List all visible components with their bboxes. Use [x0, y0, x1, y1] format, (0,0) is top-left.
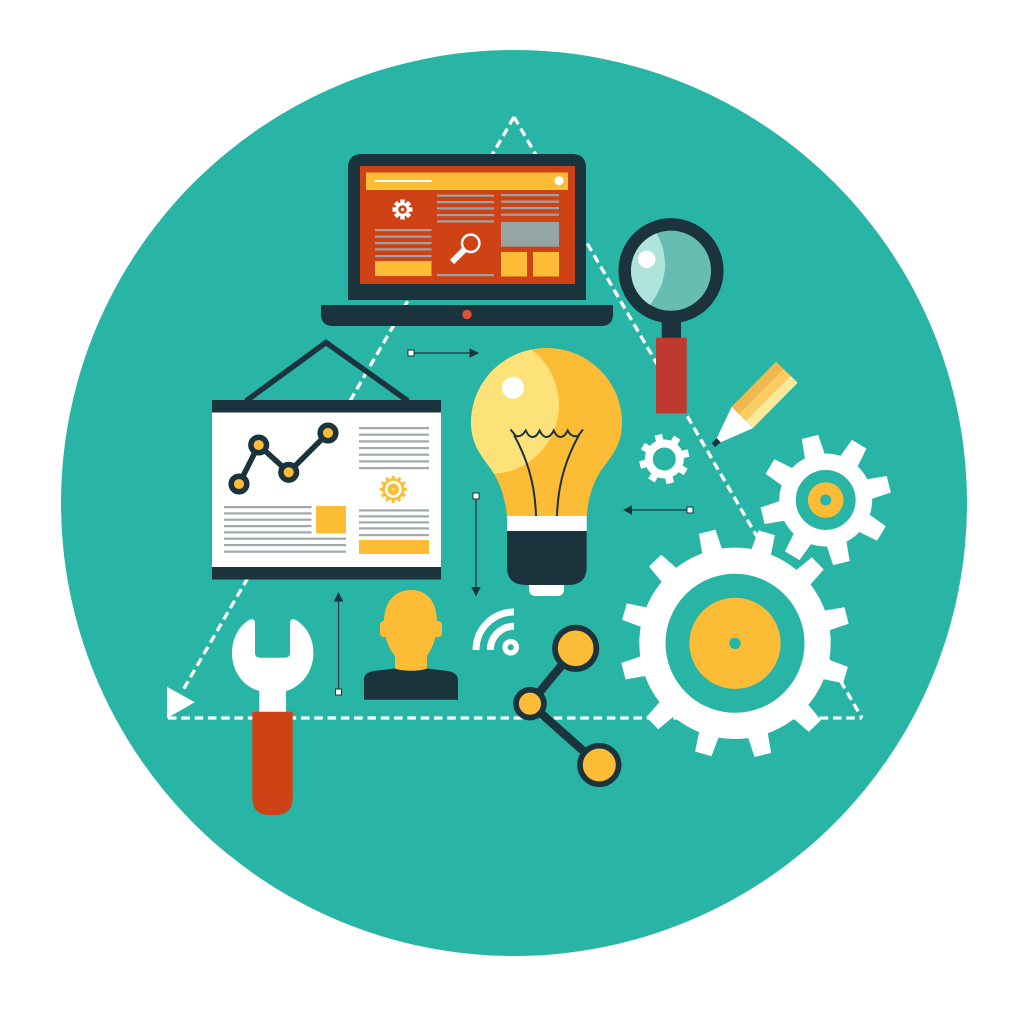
laptop screen — [360, 166, 575, 284]
laptop base — [321, 305, 613, 326]
bulb base — [507, 531, 587, 585]
laptop lid — [348, 154, 586, 300]
bulb glint — [502, 377, 524, 399]
pencil — [712, 362, 798, 447]
screen text columns — [375, 194, 559, 276]
light bulb — [471, 348, 622, 596]
magnifier neck — [662, 315, 681, 340]
poster yellow bar — [359, 540, 429, 554]
triangle arrowhead — [167, 687, 195, 718]
magnifying glass — [620, 224, 717, 413]
screen image placeholder — [501, 222, 559, 247]
poster top bar — [212, 400, 441, 412]
magnifier lens — [625, 224, 717, 317]
wrench handle — [252, 712, 293, 815]
person ears — [380, 621, 442, 637]
poster gear icon — [380, 476, 407, 503]
wrench — [232, 619, 313, 815]
small gear — [639, 434, 689, 484]
magnifier handle — [656, 338, 687, 413]
line chart — [231, 425, 336, 492]
poster board — [212, 342, 441, 580]
screen magnifier icon — [452, 235, 479, 262]
screen gear icon — [392, 200, 412, 220]
person shoulders — [364, 668, 458, 700]
share network icon — [516, 628, 619, 784]
laptop power dot — [462, 310, 472, 319]
poster hanger — [246, 342, 408, 401]
lens highlight — [631, 233, 665, 304]
wifi icon — [476, 612, 516, 653]
bulb filament — [510, 430, 583, 516]
arrow: down, left of bulb — [471, 493, 481, 596]
person — [364, 590, 458, 700]
medium gear — [760, 434, 891, 566]
lens glint — [638, 251, 655, 268]
poster yellow square — [316, 506, 346, 534]
laptop — [321, 154, 613, 326]
person head — [384, 590, 437, 672]
wrench head — [232, 619, 313, 712]
bulb collar — [507, 516, 587, 531]
bulb highlight — [471, 350, 559, 474]
screen yellow blocks — [375, 252, 559, 276]
dashed triangle — [168, 117, 862, 718]
arrow: right, above bulb — [408, 348, 479, 358]
screen header bar — [366, 172, 568, 190]
bulb tip — [529, 585, 564, 596]
poster text lines — [224, 427, 429, 553]
bulb glass — [471, 348, 622, 516]
large gear — [621, 529, 849, 757]
poster bottom bar — [212, 567, 441, 580]
background circle — [61, 50, 967, 956]
poster sheet — [212, 400, 441, 579]
arrow: left, right of bulb — [623, 505, 693, 515]
arrow: up, beside wrench — [334, 592, 343, 695]
